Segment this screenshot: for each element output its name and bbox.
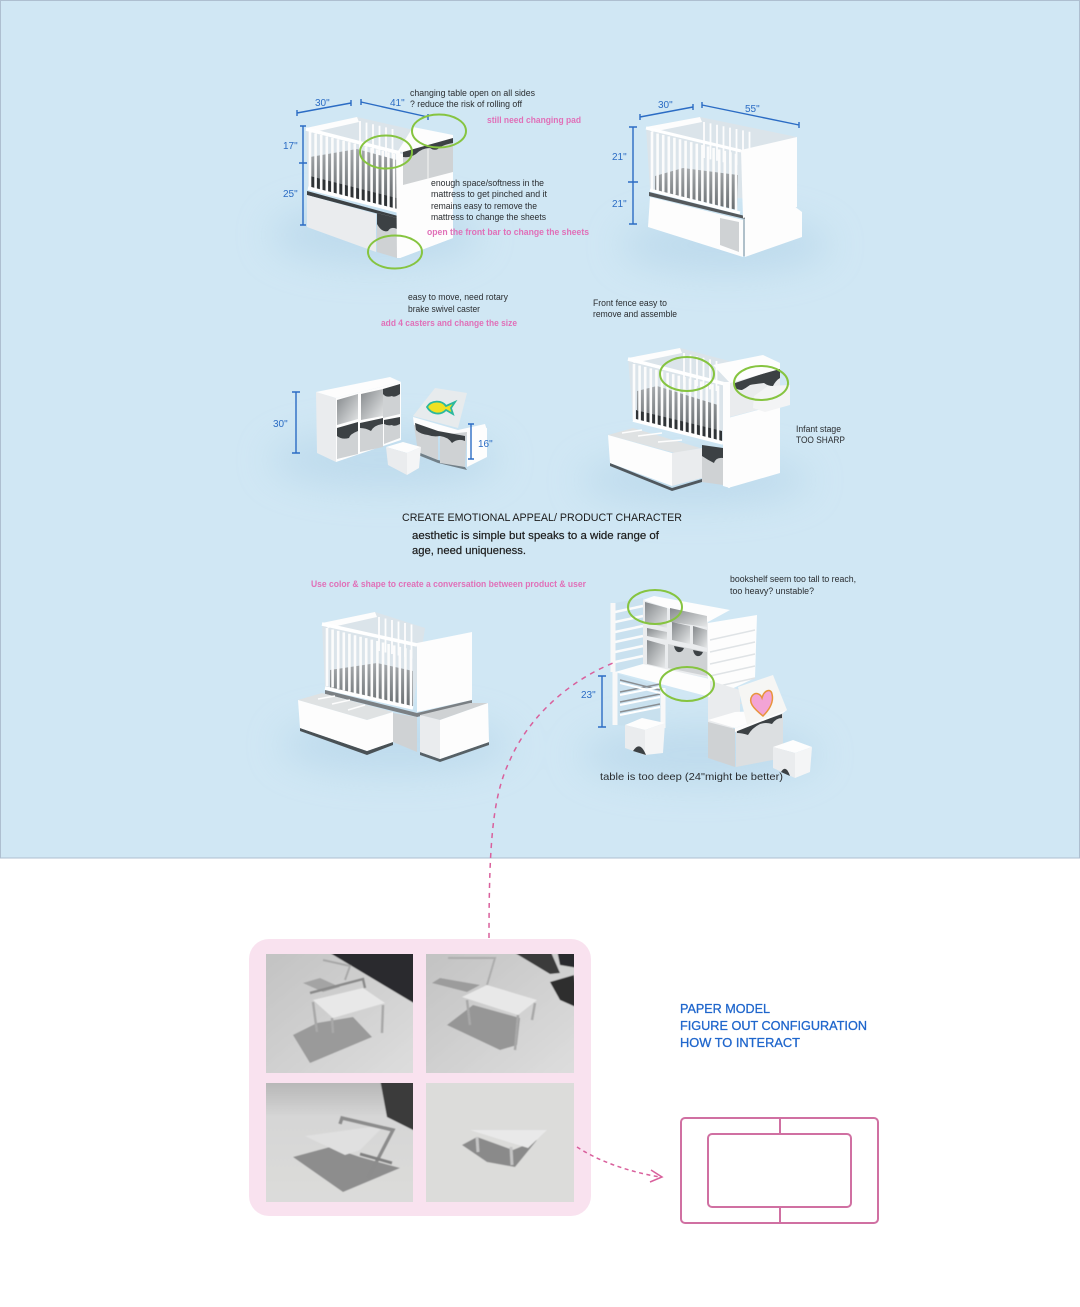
note: infant stage: Infant stage [796,424,841,434]
crib 1 dimensions [283,98,428,225]
note: front fence: Front fence easy to [593,298,667,308]
crib 2 dimensions: 55" [745,104,760,115]
crib 1 annotations: enough space/softness in the [431,178,544,188]
crib 1 annotations: easy to move, need rotary [408,292,508,302]
plan diagram outline [681,1118,878,1223]
paper model label: PAPER MODEL [680,1001,770,1016]
crib 1 annotations: open the front bar to change the sheets [427,227,589,237]
blue background panel [0,0,1080,858]
note: infant stage [796,424,845,445]
crib 1 dimensions: 30" [315,98,330,109]
crib 2 dimensions: 30" [658,100,673,111]
cube [773,740,812,778]
desk dimension: 23" [581,690,596,701]
paper model label: FIGURE OUT CONFIGURATION [680,1018,867,1033]
desk annotations: too heavy? unstable? [730,586,814,596]
bookshelf and desk dimensions: 16" [478,439,493,450]
arrow: photos to plan diagram [577,1147,662,1182]
pink note: color and shape: Use color & shape to create a conversation between product & user [311,579,586,589]
crib 1 dimensions: 41" [390,98,405,109]
crib 1 with changing table [306,117,453,258]
note: front fence [593,298,677,319]
crib 1 annotations: changing table open on all sides [410,88,535,98]
desk configuration with bookshelf [613,596,757,758]
crib 2 dimensions [612,100,799,224]
desk annotations: bookshelf seem too tall to reach, [730,574,856,584]
photo: paper chair side view [266,1083,413,1202]
desk annotations [600,574,856,783]
crib 1 annotations: remains easy to remove the [431,201,537,211]
crib 1 annotations: ? reduce the risk of rolling off [410,99,522,109]
photo: paper table low [426,1083,574,1202]
crib 4 with two drawers open [298,612,489,762]
crib 1 annotations: add 4 casters and change the size [381,318,517,328]
note: front fence: remove and assemble [593,309,677,319]
toddler desk with card [413,388,487,470]
stool cube [386,442,421,475]
heading: emotional appeal [402,512,682,557]
crib 3 with pulled out drawer [608,348,790,491]
paper model photo panel [249,939,591,1216]
soft floor shadows [270,205,830,783]
stool [625,718,665,755]
crib 2 dimensions: 21" [612,152,627,163]
crib 1 dimensions: 17" [283,141,298,152]
card with heart drawing [738,675,787,725]
crib 2 dimensions: 21" [612,199,627,210]
crib 1 dimensions: 25" [283,189,298,200]
green callout circles on desk [628,590,714,701]
crib 1 annotations: mattress to change the sheets [431,212,546,222]
crib 1 annotations [381,88,589,328]
note: infant stage: TOO SHARP [796,435,845,445]
dashed arrow from desk to paper models [489,663,613,938]
bookshelf and desk dimensions: 30" [273,419,288,430]
crib 1 annotations: still need changing pad [487,115,581,125]
heading: emotional appeal: CREATE EMOTIONAL APPEAL/ PRODUCT CHARACTER [402,512,682,524]
green callout circles on crib 3 [660,357,788,400]
crib 1 annotations: mattress to get pinched and it [431,189,547,199]
bookshelf [316,377,401,462]
photo: paper table 2 [426,954,574,1073]
bookshelf and desk dimensions [273,392,493,459]
desk dimension [581,676,606,727]
bench with drawer [708,710,787,767]
paper model label: HOW TO INTERACT [680,1035,800,1050]
desk annotations: table is too deep (24"might be better) [600,771,783,783]
icon: fish drawing on card [427,402,455,414]
heading: emotional appeal: aesthetic is simple but speaks to a wide range of [412,530,660,542]
paper model label [680,1001,867,1050]
heading: emotional appeal: age, need uniqueness. [412,545,526,557]
green callout circles on crib 1 [360,114,466,268]
crib 1 annotations: brake swivel caster [408,304,480,314]
photo: paper table 1 [266,954,413,1073]
crib 2 with sliding drawer [646,117,802,257]
